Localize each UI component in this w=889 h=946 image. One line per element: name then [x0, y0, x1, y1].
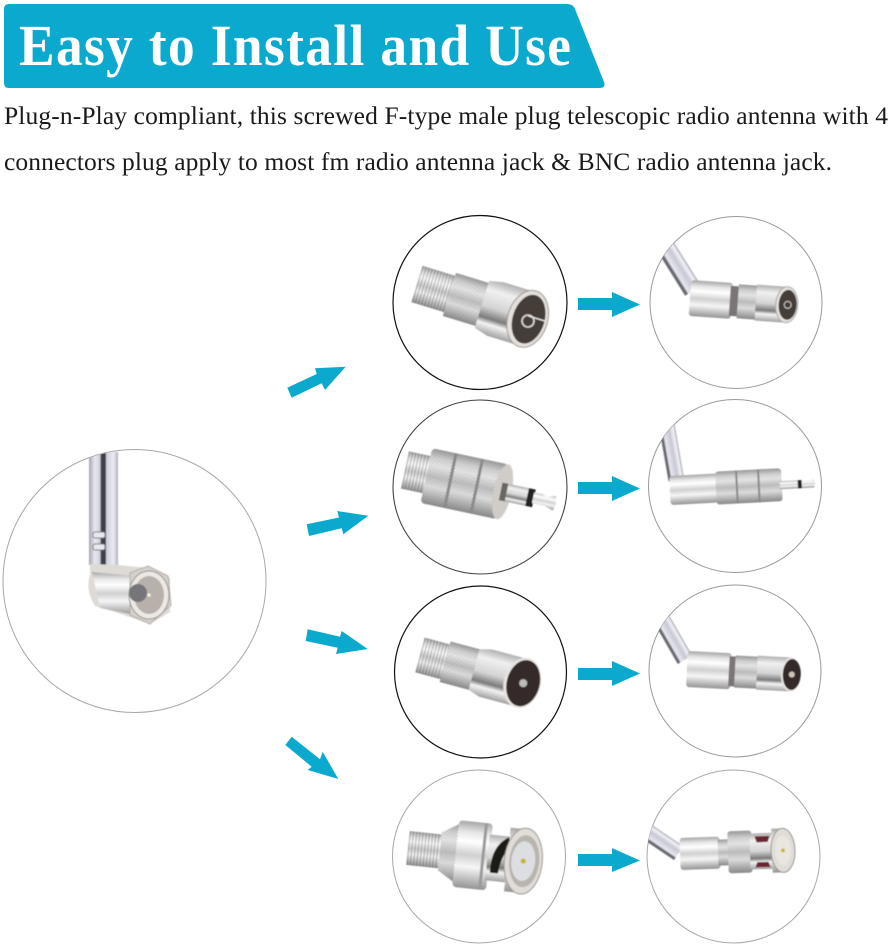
icon: assembled IEC male	[658, 616, 802, 692]
icon: assembled BNC	[648, 825, 796, 874]
arrow: to IEC female adapter	[287, 367, 346, 398]
description text: connectors plug apply to most fm radio antenna jack & BNC radio antenna jack.	[4, 147, 832, 176]
arrow: to mono jack adapter	[307, 511, 368, 536]
description text	[4, 101, 888, 176]
description text: Plug-n-Play compliant, this screwed F-type male plug telescopic radio antenna with 4	[4, 101, 888, 130]
icon: assembled IEC female	[662, 243, 799, 324]
panel: antenna with IEC female adapter	[650, 216, 822, 388]
panel: antenna with BNC adapter	[639, 770, 820, 943]
title: Easy to Install and Use	[19, 14, 571, 79]
panel: IEC female adapter	[393, 216, 567, 390]
panel: antenna with mono jack adapter	[648, 400, 822, 572]
panel: IEC male adapter	[394, 586, 566, 758]
icon: assembled mono jack	[661, 424, 816, 506]
icon: BNC connector	[404, 815, 546, 896]
arrow: to BNC adapter	[285, 737, 338, 779]
panel: antenna with F-type male plug	[3, 450, 266, 712]
icon: F-type antenna plug	[88, 452, 171, 624]
panel: BNC adapter	[392, 770, 566, 943]
icon: IEC female connector	[408, 257, 555, 352]
title banner	[4, 4, 604, 88]
icon: IEC male connector	[413, 631, 547, 712]
icon: 3.5 mm mono jack connector	[399, 444, 562, 530]
arrow: row 3	[578, 661, 640, 686]
panel: antenna with IEC male adapter	[647, 585, 821, 757]
panel: mono jack adapter	[393, 400, 567, 574]
arrow: row 2	[578, 476, 640, 501]
arrow: to IEC male adapter	[306, 629, 368, 654]
arrow: row 1	[578, 292, 640, 317]
arrow: row 4	[578, 848, 640, 872]
